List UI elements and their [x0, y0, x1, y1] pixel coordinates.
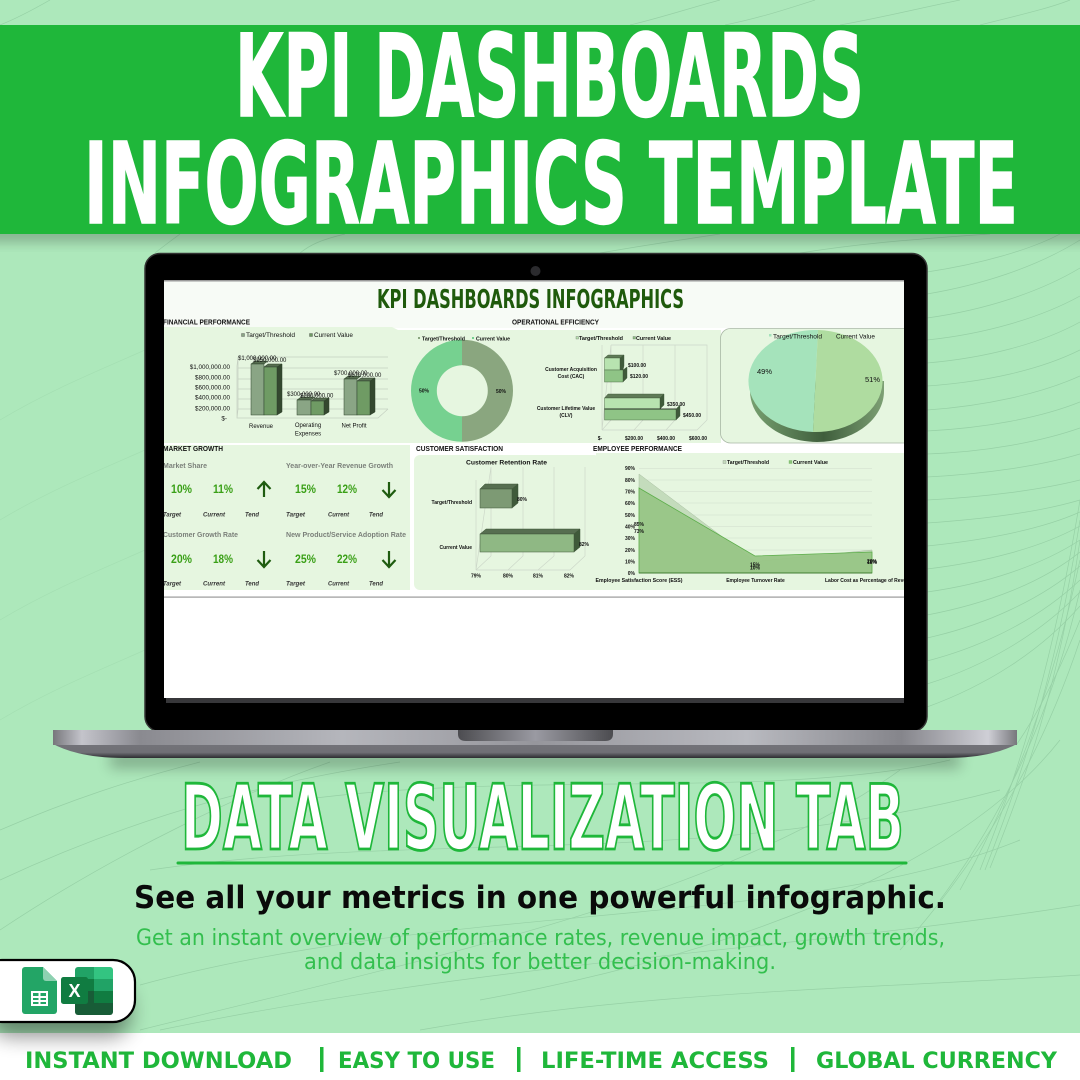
- screen: [164, 280, 904, 698]
- panel: financial performance: [163, 318, 398, 443]
- operating bars: [297, 397, 329, 415]
- bar chart: retention: [432, 467, 590, 580]
- bar chart: retention: 82%: [579, 542, 590, 548]
- footer: life-time access: LIFE-TIME ACCESS: [541, 1049, 769, 1074]
- metric: year-over-year revenue growth: 15%: [295, 484, 316, 496]
- bar chart: financial: $400,000.00: [195, 394, 230, 402]
- net profit bars: [344, 376, 375, 415]
- chart title: Customer Retention Rate: [466, 460, 548, 466]
- metric: customer growth rate: Customer Growth Rate: [163, 530, 238, 539]
- horizontal bar chart: acquisition and lifetime value: $600.00: [689, 436, 707, 442]
- heading: operational efficiency: OPERATIONAL EFFICIENCY: [512, 318, 599, 326]
- metric: new product adoption rate: Target: [286, 580, 306, 588]
- metric: customer growth rate: Current: [203, 580, 226, 588]
- area chart: Employee Turnover Rate: [726, 578, 785, 584]
- metric: year-over-year revenue growth: Target: [286, 512, 306, 518]
- metric: customer growth rate: 18%: [213, 554, 233, 566]
- bar chart: financial: [190, 356, 388, 438]
- bar chart: financial: $-: [221, 416, 227, 422]
- panel: employee performance: [593, 444, 915, 590]
- panel: pie chart: 49%: [757, 367, 772, 376]
- legend: Target/Threshold: [246, 332, 295, 339]
- laptop: [53, 254, 1017, 768]
- area chart: 85%: [634, 522, 645, 528]
- bar chart: financial: $200,000.00: [195, 406, 230, 412]
- title banner: [0, 10, 1080, 250]
- metric: year-over-year revenue growth: [286, 461, 396, 518]
- metric: customer growth rate: [163, 530, 270, 588]
- horizontal bar chart: acquisition and lifetime value: Current Value: [636, 336, 671, 342]
- area chart: 10%: [625, 560, 636, 566]
- donut chart: Target/Threshold: [422, 336, 465, 342]
- metric: customer growth rate: Tend: [245, 580, 260, 588]
- icon: down arrow: [258, 551, 270, 567]
- bar chart: financial: Net Profit: [341, 424, 367, 430]
- bar chart: financial: $1,000,000.00: [190, 364, 230, 371]
- area chart: 20%: [625, 548, 636, 554]
- footer: global currency: GLOBAL CURRENCY: [816, 1049, 1058, 1074]
- legend: [722, 460, 828, 465]
- metric: market share: [163, 461, 270, 518]
- icon: microsoft excel: [61, 967, 113, 1015]
- area chart: 90%: [625, 466, 636, 472]
- bar chart: retention: Target/Threshold: [432, 500, 472, 506]
- bar chart: retention: Current Value: [439, 545, 472, 551]
- horizontal bar chart: acquisition and lifetime value: Customer Acquisition: [545, 367, 597, 373]
- dashboard on screen: [163, 280, 920, 598]
- bar chart: financial: $700,000.00: [334, 371, 368, 377]
- heading: market growth: MARKET GROWTH: [163, 444, 223, 453]
- legend: Current Value: [793, 460, 828, 466]
- camera: [530, 266, 540, 276]
- metric: new product adoption rate: New Product/Service Adoption Rate: [286, 530, 406, 539]
- footer strip: [0, 1033, 1080, 1080]
- metric: year-over-year revenue growth: Tend: [369, 512, 384, 518]
- bar chart: retention: 80%: [517, 497, 528, 503]
- bar chart: retention: 79%: [471, 574, 482, 580]
- description text: and data insights for better decision-making.: [304, 950, 776, 975]
- horizontal bar chart: acquisition and lifetime value: Customer Lifetime Value: [537, 406, 595, 412]
- metric: new product adoption rate: 22%: [337, 554, 357, 566]
- bar chart: financial: $280,000.00: [300, 394, 334, 400]
- horizontal bar chart: acquisition and lifetime value: $350.00: [667, 402, 685, 408]
- panel: pie chart: [720, 328, 920, 443]
- legend: Current Value: [314, 332, 353, 339]
- bar chart: retention: 82%: [564, 574, 575, 580]
- laptop bezel: [145, 254, 927, 732]
- horizontal bar chart: acquisition and lifetime value: $-: [598, 436, 603, 442]
- area chart: 70%: [625, 490, 636, 496]
- panel: pie chart: Current Value: [836, 334, 875, 340]
- donut chart: [411, 336, 513, 442]
- area chart: 0%: [628, 571, 636, 577]
- horizontal bar chart: acquisition and lifetime value: $100.00: [628, 363, 646, 369]
- metric: new product adoption rate: 25%: [295, 554, 316, 566]
- area chart: 18%: [867, 560, 878, 566]
- bar chart: financial: $670,000.00: [348, 373, 382, 379]
- heading: customer satisfaction: CUSTOMER SATISFACTION: [416, 444, 503, 453]
- heading: financial performance: FINANCIAL PERFORMANCE: [163, 318, 250, 326]
- heading: employee performance: EMPLOYEE PERFORMANCE: [593, 444, 682, 453]
- horizontal bar chart: acquisition and lifetime value: Cost (CAC): [558, 374, 585, 380]
- laptop base: [53, 730, 1017, 758]
- horizontal bar chart: acquisition and lifetime value: $120.00: [630, 374, 648, 380]
- icon: down arrow: [382, 551, 396, 567]
- panel: operational efficiency: [398, 318, 721, 443]
- icon: google sheets: [22, 967, 57, 1014]
- icon: up arrow: [258, 482, 270, 497]
- icon: down arrow: [382, 482, 396, 497]
- bar chart: retention: 81%: [533, 574, 544, 580]
- software badge: [0, 960, 135, 1037]
- dashboard title: KPI DASHBOARDS INFOGRAPHICS: [377, 285, 684, 315]
- bar chart: retention: 80%: [503, 574, 514, 580]
- area chart: 80%: [625, 478, 636, 484]
- horizontal bar chart: acquisition and lifetime value: Target/Threshold: [579, 336, 623, 342]
- metric: market share: 11%: [213, 484, 233, 496]
- metric: new product adoption rate: Tend: [369, 580, 384, 588]
- area chart: Labor Cost as Percentage of Revenue: [825, 578, 915, 584]
- description text: Get an instant overview of performance rates, revenue impact, growth trends,: [136, 926, 945, 951]
- metric: customer growth rate: Target: [163, 580, 182, 588]
- footer: instant download: INSTANT DOWNLOAD: [25, 1049, 292, 1074]
- heading underline: [176, 862, 908, 864]
- bar chart: financial: Revenue: [249, 424, 274, 430]
- horizontal bar chart: acquisition and lifetime value: $450.00: [683, 413, 701, 419]
- area chart: 15%: [750, 562, 761, 568]
- bar chart: financial: Operating: [295, 423, 321, 429]
- metric: year-over-year revenue growth: Current: [328, 512, 350, 518]
- legend: [241, 332, 353, 338]
- bar chart: financial: $800,000.00: [195, 374, 230, 382]
- metric: market share: Target: [163, 512, 182, 518]
- horizontal bar chart: acquisition and lifetime value: (CLV): [560, 413, 573, 419]
- area chart: 50%: [625, 513, 636, 519]
- panel: pie chart: Target/Threshold: [773, 334, 822, 340]
- hinge notch: [458, 730, 613, 741]
- area chart: 73%: [634, 529, 645, 535]
- metric: year-over-year revenue growth: Year-over-Year Revenue Growth: [286, 461, 393, 470]
- area chart: Employee Satisfaction Score (ESS): [596, 578, 683, 584]
- legend: Target/Threshold: [727, 460, 769, 466]
- horizontal bar chart: acquisition and lifetime value: $200.00: [625, 436, 643, 442]
- bar chart: financial: $950,000.00: [253, 358, 287, 364]
- panel: market growth: [163, 444, 410, 590]
- donut chart: 50%: [419, 388, 430, 394]
- subheading: See all your metrics in one powerful infographic.: [134, 880, 946, 916]
- metric: market share: Current: [203, 512, 226, 518]
- metric: market share: Tend: [245, 512, 260, 518]
- metric: new product adoption rate: Current: [328, 580, 350, 588]
- metric: market share: 10%: [171, 484, 192, 496]
- revenue bars: [251, 361, 282, 415]
- donut chart: Current Value: [476, 336, 510, 342]
- bar chart: financial: $300,000.00: [287, 392, 321, 398]
- panel: pie chart: 51%: [865, 375, 880, 384]
- bar chart: financial: $1,000,000.00: [238, 356, 277, 362]
- donut chart: 50%: [496, 389, 507, 395]
- area chart: 10%: [750, 566, 761, 572]
- horizontal bar chart: acquisition and lifetime value: [537, 336, 707, 442]
- horizontal bar chart: acquisition and lifetime value: $400.00: [657, 436, 675, 442]
- area chart: 30%: [625, 536, 636, 542]
- bar chart: financial: $600,000.00: [195, 384, 230, 392]
- area chart: [596, 466, 915, 584]
- metric: market share: Market Share: [163, 461, 207, 470]
- metric: new product adoption rate: [286, 530, 406, 588]
- area chart: 40%: [625, 524, 636, 530]
- icon: microsoft excel: X: [68, 981, 81, 1001]
- panel: customer satisfaction: [414, 444, 600, 590]
- description text: [136, 926, 945, 975]
- area chart: 60%: [625, 501, 636, 507]
- metric: year-over-year revenue growth: 12%: [337, 484, 357, 496]
- bar chart: financial: Expenses: [295, 432, 321, 438]
- area chart: 20%: [867, 559, 878, 565]
- metric: customer growth rate: 20%: [171, 554, 192, 566]
- footer: easy to use: EASY TO USE: [338, 1049, 495, 1074]
